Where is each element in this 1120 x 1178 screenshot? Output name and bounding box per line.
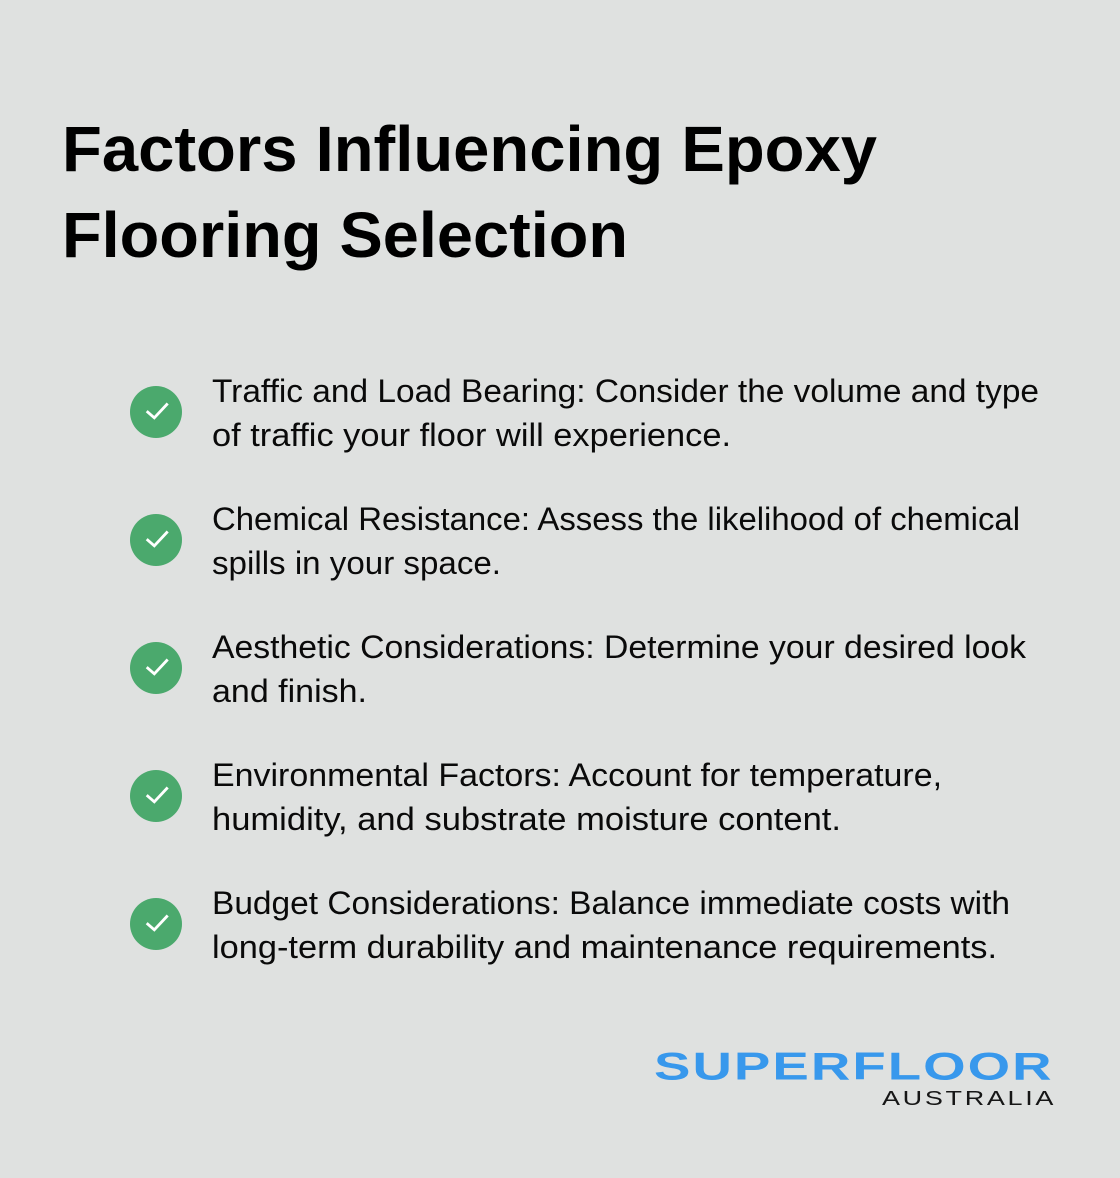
logo: Superfloor Australia: SUPERFLOOR	[654, 1045, 1052, 1089]
item: aesthetic considerations	[130, 629, 1027, 709]
logo: Superfloor Australia	[654, 1045, 1054, 1110]
text: environmental factors	[212, 757, 942, 837]
text: environmental factors: humidity, and substrate moisture content.	[212, 801, 841, 837]
item: budget considerations	[130, 885, 1010, 965]
text: traffic and load bearing	[212, 373, 1039, 453]
text: budget considerations: long-term durability and maintenance requirements.	[212, 929, 997, 965]
text: aesthetic considerations: and finish.	[212, 673, 367, 709]
text: chemical resistance	[212, 501, 1020, 581]
text: chemical resistance: Chemical Resistance: Assess the likelihood of chemical	[212, 501, 1020, 537]
title	[62, 113, 877, 271]
icon: check badge	[130, 514, 182, 566]
text: traffic and load bearing: of traffic your floor will experience.	[212, 417, 731, 453]
item: traffic and load bearing	[130, 373, 1039, 453]
item: environmental factors	[130, 757, 942, 837]
icon: check badge	[130, 386, 182, 438]
title: Factors Influencing Epoxy	[62, 113, 877, 185]
text: aesthetic considerations: Aesthetic Considerations: Determine your desired look	[212, 629, 1027, 665]
title: Flooring Selection	[62, 199, 628, 271]
checklist	[130, 373, 1039, 965]
text: budget considerations	[212, 885, 1010, 965]
text: chemical resistance: spills in your space.	[212, 545, 501, 581]
icon: check badge	[130, 898, 182, 950]
text: traffic and load bearing: Traffic and Load Bearing: Consider the volume and type	[212, 373, 1039, 409]
item: chemical resistance	[130, 501, 1020, 581]
text: budget considerations: Budget Considerations: Balance immediate costs with	[212, 885, 1010, 921]
text: aesthetic considerations	[212, 629, 1027, 709]
logo: Superfloor Australia: AUSTRALIA	[882, 1087, 1054, 1110]
icon: check badge	[130, 642, 182, 694]
text: environmental factors: Environmental Factors: Account for temperature,	[212, 757, 942, 793]
icon: check badge	[130, 770, 182, 822]
